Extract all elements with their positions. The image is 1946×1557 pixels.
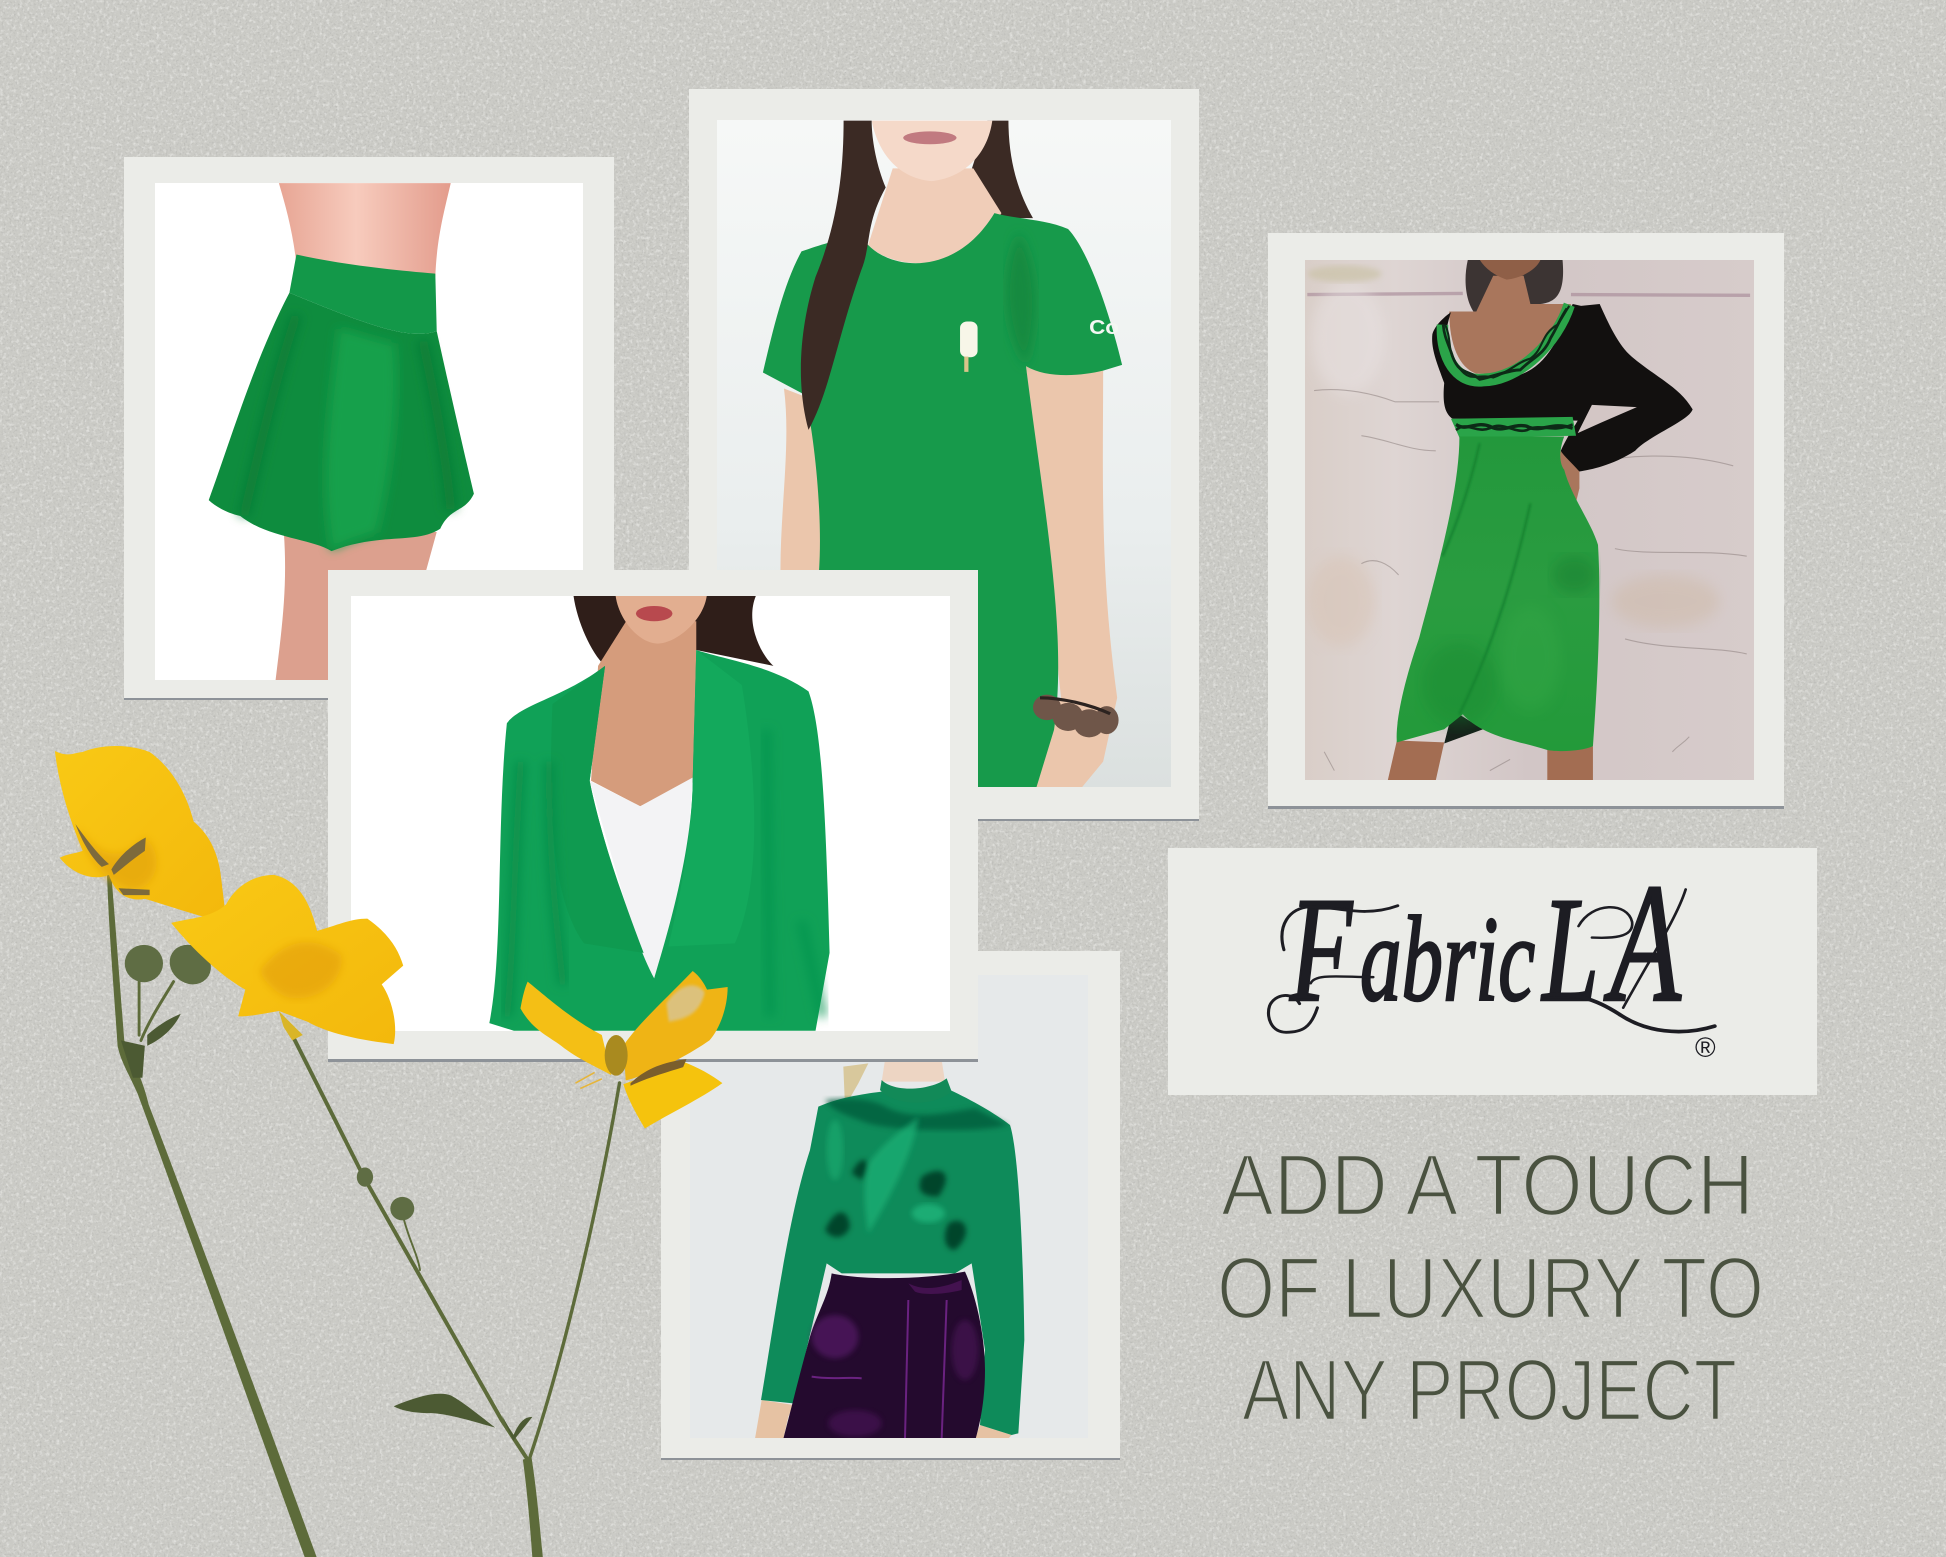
panel: green and black dress photo card [1268,233,1784,809]
tagline line 3: ANY PROJECT [1242,1342,1737,1439]
tagline line 1: ADD A TOUCH [1221,1137,1754,1234]
logo wordmark: F [1289,867,1354,1033]
flower 3 [520,971,728,1129]
panel: FabricLA logo card [1168,848,1817,1095]
stems [107,875,543,1557]
photo: green skater skirt on mannequin [155,183,583,682]
tagline heading [1217,1137,1764,1439]
panel: satin blouse photo card [661,951,1120,1460]
icon: popsicle on chest [960,321,978,372]
photo: woman in velvet and satin dress against wall [1305,260,1754,780]
tagline line 2: OF LUXURY TO [1217,1240,1764,1337]
logo wordmark: L [1541,867,1599,1033]
logo wordmark: A [1604,849,1682,1037]
panel: t-shirt photo card [689,89,1199,821]
panel: skirt photo card [124,157,614,700]
panel: green blazer photo card [328,570,978,1062]
photo: green satin blouse with purple velvet trousers [755,1062,1024,1438]
scrunchie on wrist [1033,695,1119,737]
sleeve print: Co [1089,316,1119,339]
logo wordmark: abric [1360,891,1535,1027]
registered mark: ® [1695,1032,1716,1063]
flower 2 [171,875,403,1044]
flower 1 [55,746,226,920]
illustration: three pressed yellow flowers [55,746,728,1557]
photo: woman in green blazer [351,596,950,1031]
photo: woman in green t-shirt dress [717,120,1171,787]
buds and leaves [121,938,532,1441]
logo flourishes [1268,889,1715,1032]
